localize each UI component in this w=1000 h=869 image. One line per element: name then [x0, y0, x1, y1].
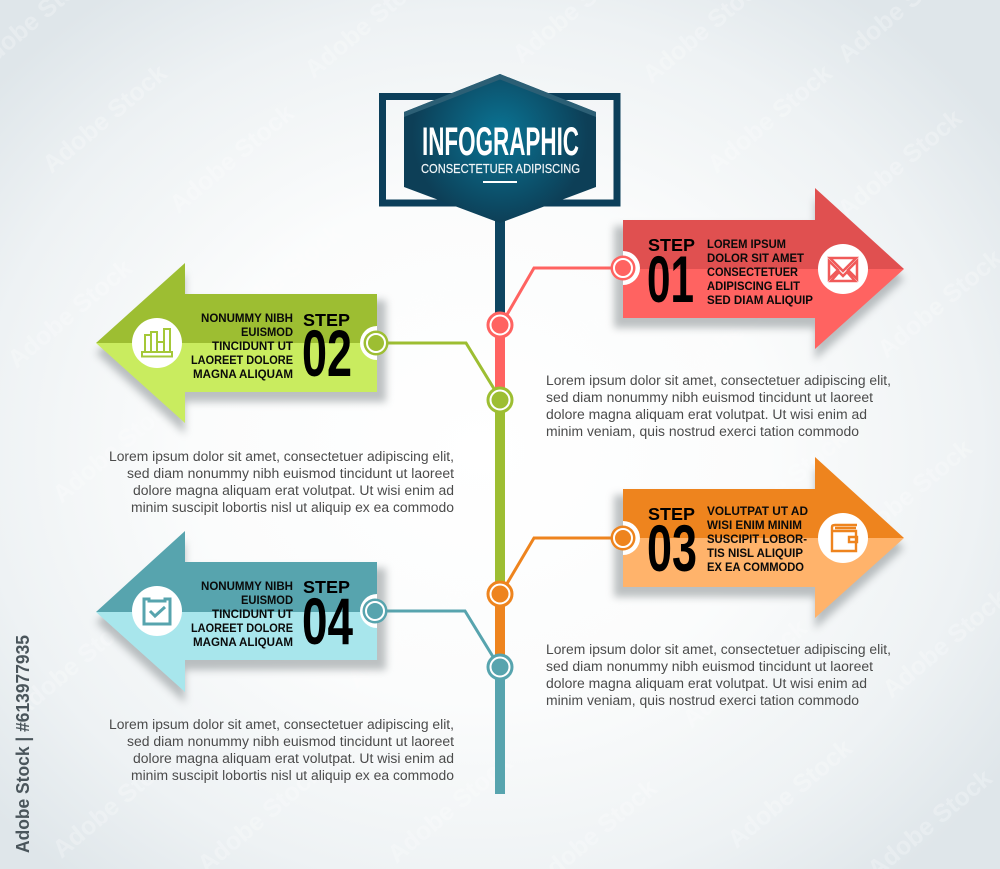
- icon: bar chart: [132, 318, 182, 368]
- arrow text: NONUMMY NIBH: [201, 579, 293, 593]
- panel: step 4 arrow: [96, 531, 386, 703]
- hexagon: [404, 74, 596, 223]
- arrow text: TINCIDUNT UT: [212, 607, 294, 621]
- arrow lower half: [623, 269, 904, 349]
- arrow text: SUSCIPIT LOBOR-: [707, 532, 807, 546]
- arrow text: [191, 579, 294, 649]
- text block: step 3 description: dolore magna aliquam erat volutpat. Ut wisi enim ad: [546, 676, 867, 691]
- title badge: [382, 74, 617, 223]
- arrow text: [707, 237, 813, 307]
- watermark pattern: Adobe Stock: [717, 424, 852, 544]
- arrow text: TIS NISL ALIQUIP: [707, 546, 803, 560]
- panel: step 1 arrow: [614, 188, 904, 360]
- arrow text: LOREM IPSUM: [707, 237, 786, 251]
- arrow text: MAGNA ALIQUAM: [193, 367, 293, 381]
- text block: step 3 description: sed diam nonummy nibh euismod tincidunt ut laoreet: [546, 659, 873, 674]
- watermark pattern: Adobe Stock: [832, 104, 967, 224]
- node: step 4 on arrow: [360, 594, 388, 628]
- text block: step 4 description: [109, 717, 454, 783]
- watermark pattern: Adobe Stock: [537, 254, 672, 374]
- step label: STEP: [303, 577, 350, 597]
- hexagon upper edge highlight: [404, 74, 596, 117]
- watermark pattern: Adobe Stock: [722, 734, 857, 854]
- text block: step 4 description: sed diam nonummy nibh euismod tincidunt ut laoreet: [127, 734, 454, 749]
- text block: step 2 description: [109, 449, 454, 515]
- watermark pattern: Adobe Stock: [337, 259, 472, 379]
- arrow text: EUISMOD: [241, 593, 293, 607]
- text block: step 2 description: Lorem ipsum dolor sit amet, consectetuer adipiscing elit,: [109, 449, 454, 464]
- arrow text: NONUMMY NIBH: [201, 311, 293, 325]
- arrow text: CONSECTETUER: [707, 265, 798, 279]
- text block: step 1 description: Lorem ipsum dolor sit amet, consectetuer adipiscing elit,: [546, 373, 891, 388]
- connector: step 4: [375, 611, 495, 660]
- watermark pattern: Adobe Stock: [47, 389, 182, 509]
- watermark pattern: Adobe Stock: [527, 564, 662, 684]
- watermark pattern: Adobe Stock: [382, 749, 517, 869]
- watermark pattern: Adobe Stock: [672, 269, 807, 389]
- step label: STEP: [303, 310, 350, 330]
- watermark pattern: Adobe Stock: [2, 254, 137, 374]
- arrow text: LAOREET DOLORE: [191, 353, 293, 367]
- arrow upper half: [96, 263, 377, 343]
- subtitle underline: [483, 181, 517, 183]
- step number: 03: [647, 511, 697, 585]
- node: step 4 on spine: [488, 655, 512, 679]
- connector: step 3: [505, 538, 623, 587]
- watermark pattern: Adobe Stock: [342, 574, 477, 694]
- icon: wallet: [818, 513, 868, 563]
- watermark pattern: Adobe Stock: [842, 434, 977, 554]
- arrow upper half: [96, 531, 377, 612]
- stock id caption: Adobe Stock | #613977935: [13, 635, 33, 853]
- arrow lower half: [96, 343, 377, 423]
- arrow text: EX EA COMMODO: [707, 560, 804, 574]
- text block: step 1 description: [546, 373, 891, 439]
- arrow text: LAOREET DOLORE: [191, 621, 293, 635]
- step label: STEP: [648, 235, 695, 255]
- watermark pattern: Adobe Stock: [702, 59, 837, 179]
- watermark pattern: Adobe Stock: [507, 414, 642, 534]
- step label: STEP: [648, 504, 695, 524]
- arrow text: [191, 311, 294, 381]
- text block: step 4 description: Lorem ipsum dolor sit amet, consectetuer adipiscing elit,: [109, 717, 454, 732]
- icon: envelope: [818, 244, 868, 294]
- arrow text: ADIPISCING ELIT: [707, 279, 801, 293]
- text block: step 2 description: dolore magna aliquam erat volutpat. Ut wisi enim ad: [133, 483, 454, 498]
- text block: step 2 description: minim suscipit lobortis nisl ut aliquip ex ea commodo: [131, 500, 454, 515]
- watermark pattern: Adobe Stock: [47, 744, 182, 864]
- subtitle text: CONSECTETUER ADIPISCING: [421, 162, 580, 176]
- arrow lower half: [96, 612, 377, 692]
- text block: step 3 description: minim veniam, quis nostrud exerci tation commodo: [546, 693, 859, 708]
- text block: step 4 description: dolore magna aliquam erat volutpat. Ut wisi enim ad: [133, 751, 454, 766]
- arrow text: EUISMOD: [241, 325, 293, 339]
- arrow upper half: [623, 457, 904, 538]
- arrow text: MAGNA ALIQUAM: [193, 635, 293, 649]
- node: step 1 on arrow: [610, 251, 640, 285]
- step number: 04: [302, 584, 353, 658]
- text block: step 1 description: sed diam nonummy nibh euismod tincidunt ut laoreet: [546, 390, 873, 405]
- connector: step 2: [377, 343, 496, 392]
- panel: step 3 arrow: [614, 457, 904, 629]
- title text: INFOGRAPHIC: [422, 120, 579, 164]
- icon: checklist: [132, 586, 182, 636]
- step number: 02: [302, 316, 352, 390]
- node: step 3 on spine: [488, 582, 512, 606]
- arrow text: [707, 504, 808, 574]
- text block: step 1 description: dolore magna aliquam erat volutpat. Ut wisi enim ad: [546, 407, 867, 422]
- step number: 01: [647, 242, 694, 316]
- watermark pattern: Adobe Stock: [164, 99, 299, 219]
- arrow shadow: [96, 273, 386, 434]
- arrow lower half: [623, 538, 904, 618]
- arrow shadow: [96, 541, 386, 703]
- connector: step 1: [505, 268, 623, 318]
- node: step 2 on arrow: [360, 326, 388, 360]
- arrow text: SED DIAM ALIQUIP: [707, 293, 813, 307]
- node: step 1 on spine: [488, 313, 512, 337]
- watermark pattern: Adobe Stock: [677, 614, 812, 734]
- arrow text: WISI ENIM MINIM: [707, 518, 802, 532]
- text block: step 1 description: minim veniam, quis nostrud exerci tation commodo: [546, 424, 859, 439]
- node: step 3 on arrow: [610, 521, 640, 555]
- arrow text: VOLUTPAT UT AD: [707, 504, 808, 518]
- watermark pattern: Adobe Stock: [212, 219, 347, 339]
- frame behind hexagon: [382, 96, 617, 203]
- text block: step 4 description: minim suscipit lobortis nisl ut aliquip ex ea commodo: [131, 768, 454, 783]
- text block: step 3 description: [546, 642, 891, 708]
- watermark pattern: Adobe Stock: [7, 604, 142, 724]
- arrow upper half: [623, 188, 904, 269]
- text block: step 3 description: Lorem ipsum dolor sit amet, consectetuer adipiscing elit,: [546, 642, 891, 657]
- text block: step 2 description: sed diam nonummy nibh euismod tincidunt ut laoreet: [127, 466, 454, 481]
- arrow text: TINCIDUNT UT: [212, 339, 294, 353]
- arrow shadow: [614, 467, 904, 629]
- central spine: [495, 215, 505, 794]
- panel: step 2 arrow: [96, 263, 386, 434]
- arrow text: DOLOR SIT AMET: [707, 251, 805, 265]
- node: step 2 on spine: [488, 388, 512, 412]
- watermark pattern: Adobe Stock: [37, 59, 172, 179]
- arrow shadow: [614, 198, 904, 360]
